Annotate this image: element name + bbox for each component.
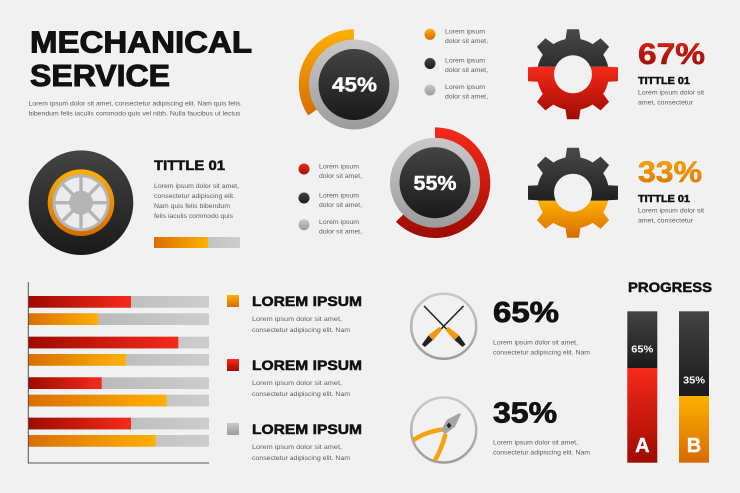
bar chart [28, 282, 209, 463]
icon: pliers [411, 398, 476, 462]
legend item: red [227, 357, 362, 398]
stat: 35% [493, 398, 591, 456]
icon: wheel [29, 150, 133, 255]
stat: 35%: Lorem ipsum dolor sit amet, [493, 440, 578, 446]
stat: 65%: consectetur adipiscing elit. Nam [493, 350, 591, 356]
legend: donut 55%: Lorem ipsum [319, 164, 360, 170]
legend: donut 55%: dolor sit amet, [319, 173, 362, 180]
title: SERVICE [30, 59, 170, 93]
title [30, 26, 252, 93]
legend: donut 45%: dolor sit amet, [445, 38, 488, 45]
legend: donut 45%: Lorem ipsum [445, 84, 486, 91]
stat: 67%: Lorem ipsum dolor sit [638, 90, 704, 96]
legend item: orange [227, 293, 362, 334]
icon: screwdrivers [411, 294, 476, 359]
legend item: red: consectetur adipiscing elit. Nam [252, 391, 351, 398]
donut chart: 55%: 55% [414, 173, 457, 195]
legend item: grey: LOREM IPSUM [252, 421, 362, 437]
stat: 33%: amet, consectetur [638, 218, 694, 224]
legend item: red: Lorem ipsum dolor sit amet, [252, 380, 342, 387]
intro text: bibendum felis iaculis commodo quis vel nibh. Nulla faucibus ut lectus [28, 111, 241, 118]
wheel text block: Nam quis felis bibendum [154, 203, 231, 210]
legend: donut 45% [424, 28, 488, 100]
donut chart: 45%: 45% [332, 74, 377, 96]
legend: donut 45%: Lorem ipsum [445, 28, 486, 36]
legend item: orange: Lorem ipsum dolor sit amet, [252, 316, 342, 323]
legend item: red: LOREM IPSUM [252, 357, 362, 373]
stat: 65%: Lorem ipsum dolor sit amet, [493, 340, 578, 346]
icon: gear 67% [528, 29, 618, 119]
wheel text block [154, 157, 239, 220]
legend item: orange: consectetur adipiscing elit. Nam [252, 327, 351, 334]
legend item: grey: Lorem ipsum dolor sit amet, [252, 444, 342, 451]
title: MECHANICAL [30, 26, 252, 60]
stat: 65%: 65% [493, 297, 559, 329]
stat: 33%: TITTLE 01 [638, 193, 690, 205]
stat: 67% [638, 38, 705, 106]
legend: donut 45%: dolor sit amet, [445, 67, 488, 74]
legend: donut 55% [298, 164, 362, 236]
legend: donut 55%: dolor sit amet, [319, 202, 362, 209]
legend item: grey [227, 421, 362, 462]
legend: donut 45%: dolor sit amet, [445, 94, 488, 100]
stat: 67%: amet, consectetur [638, 100, 694, 106]
wheel text block: consectetur adipiscing elit. [154, 193, 235, 200]
donut chart: 55% [390, 127, 490, 238]
wheel text block: TITTLE 01 [154, 157, 225, 173]
legend item: orange: LOREM IPSUM [252, 293, 362, 309]
progress column B [679, 311, 709, 463]
legend: donut 55%: Lorem ipsum [319, 192, 360, 200]
stat: 33% [638, 156, 704, 224]
wheel text block: felis iaculis commodo quis [154, 213, 234, 220]
heading: progress: PROGRESS [628, 279, 712, 295]
stat: 35%: 35% [493, 398, 557, 430]
stat: 67%: TITTLE 01 [638, 75, 690, 87]
intro text: Lorem ipsum dolor sit amet, consectetur adipiscing elit. Nam quis felis [28, 101, 241, 108]
donut chart: 45% [299, 29, 399, 130]
progress column A: 65% [631, 345, 653, 356]
legend: donut 45%: Lorem ipsum [445, 58, 486, 64]
legend item: grey: consectetur adipiscing elit. Nam [252, 455, 351, 462]
progress column B: B [687, 435, 701, 457]
stat: 33%: 33% [638, 156, 702, 189]
intro text [28, 101, 241, 118]
legend: donut 55%: dolor sit amet, [319, 228, 362, 236]
progress column A [627, 311, 657, 463]
wheel progress bar [154, 237, 240, 248]
stat: 33%: Lorem ipsum dolor sit [638, 208, 704, 214]
wheel text block: Lorem ipsum dolor sit amet, [154, 183, 239, 190]
legend: donut 55%: Lorem ipsum [319, 219, 360, 226]
progress column A: A [635, 435, 650, 457]
stat: 65% [493, 297, 591, 356]
stat: 67%: 67% [638, 38, 705, 71]
stat: 35%: consectetur adipiscing elit. Nam [493, 450, 591, 456]
icon: gear 33% [528, 148, 618, 238]
progress column B: 35% [683, 375, 705, 386]
